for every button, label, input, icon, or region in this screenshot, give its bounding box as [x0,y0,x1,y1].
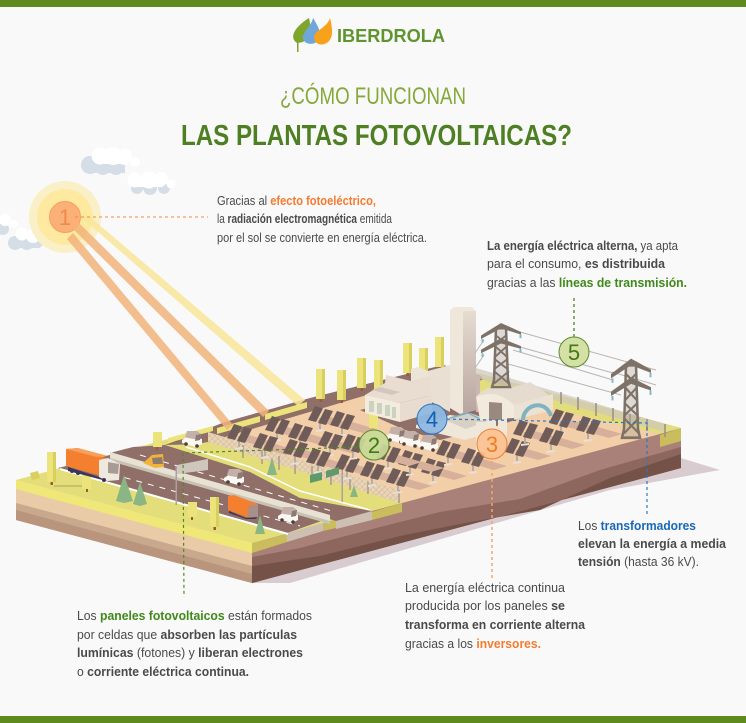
transformer yard [416,415,500,440]
sun rays [67,212,305,430]
text block 4: tensión (hasta 36 kV). [578,555,699,569]
dashed leader: 2 [183,447,357,597]
text block 3: producida por los paneles se [405,599,565,613]
text block 3: La energía eléctrica continua [405,581,565,595]
lower road [58,455,330,533]
power plant [365,307,507,452]
roads [58,442,402,534]
yellow bus [143,454,164,468]
marker 5 [559,337,589,367]
text block 1 [217,194,427,245]
barrier [110,452,330,524]
grass wedge [186,442,402,511]
marker 5: 5 [568,340,580,365]
marker 3 [477,429,507,459]
marker 1: 1 [59,205,71,230]
upper road [110,445,372,521]
grass back right [478,373,681,434]
yellow trees back [316,337,444,428]
text block 5: La energía eléctrica alterna, ya apta [487,239,678,253]
text block 4: elevan la energía a media [578,537,727,551]
text block 3: gracias a los inversores. [405,637,541,651]
pylon left [481,323,522,387]
marker 4: 4 [426,407,438,432]
left face [16,480,252,583]
text block 3: transforma en corriente alterna [405,618,586,632]
text block 5: para el consumo, es distribuida [487,257,666,271]
surface [16,365,681,543]
right face [252,428,681,583]
fence back right [476,368,665,437]
text block 2 [77,609,312,679]
text block 5: gracias a las líneas de transmisión. [487,276,687,290]
text block 2: Los paneles fotovoltaicos están formados [77,609,312,623]
marker 4 [417,404,447,434]
logo: Iberdrola [293,18,445,52]
hangar [476,382,553,420]
upper block [365,375,432,403]
pine trees [116,457,358,534]
fence along plot [208,432,400,503]
front grass trees [30,432,219,530]
bottom bar [0,716,746,723]
cars [182,427,438,524]
ground shadow [252,458,720,583]
text block 2: o corriente eléctrica continua. [77,665,249,679]
title [181,83,572,152]
text block 2: por celdas que absorben las partículas [77,628,297,642]
text block 4 [578,519,727,569]
logo: Iberdrola: IBERDROLA [337,25,445,46]
tower [450,307,476,414]
title: ¿CÓMO FUNCIONAN [280,83,466,110]
right corner grass [660,428,681,447]
text block 3 [405,581,586,651]
truck [66,448,120,482]
dashed leader: 1 [75,216,208,218]
road signs [176,459,343,505]
text block 1: Gracias al efecto fotoeléctrico, [217,194,376,208]
terrain block [16,365,681,583]
text block 5 [487,239,687,290]
marker 3: 3 [486,432,498,457]
marker 2 [359,430,389,460]
power lines [475,332,656,395]
dashed leader: 4 [441,419,647,515]
text block 2: lumínicas (fotones) y liberan electrones [77,646,303,660]
sun [29,181,101,253]
solar panels [227,406,622,494]
text block 1: por el sol se convierte en energía eléctrica. [217,231,427,245]
mid block [428,365,450,412]
text block 1: la radiación electromagnética emitida [217,212,392,226]
text block 4: Los transformadores [578,519,696,533]
yellow edge strips [168,426,213,443]
clouds [0,147,176,250]
sand plot [208,385,660,503]
marker 2: 2 [368,433,380,458]
title: LAS PLANTAS FOTOVOLTAICAS? [181,120,572,152]
pylon right [611,359,652,438]
orange van [228,495,258,519]
road band behind panels [165,365,490,445]
front faces [365,395,400,422]
top bar [0,0,746,7]
dashed leader: 5 [573,298,575,342]
dashed leader: 3 [491,455,493,578]
